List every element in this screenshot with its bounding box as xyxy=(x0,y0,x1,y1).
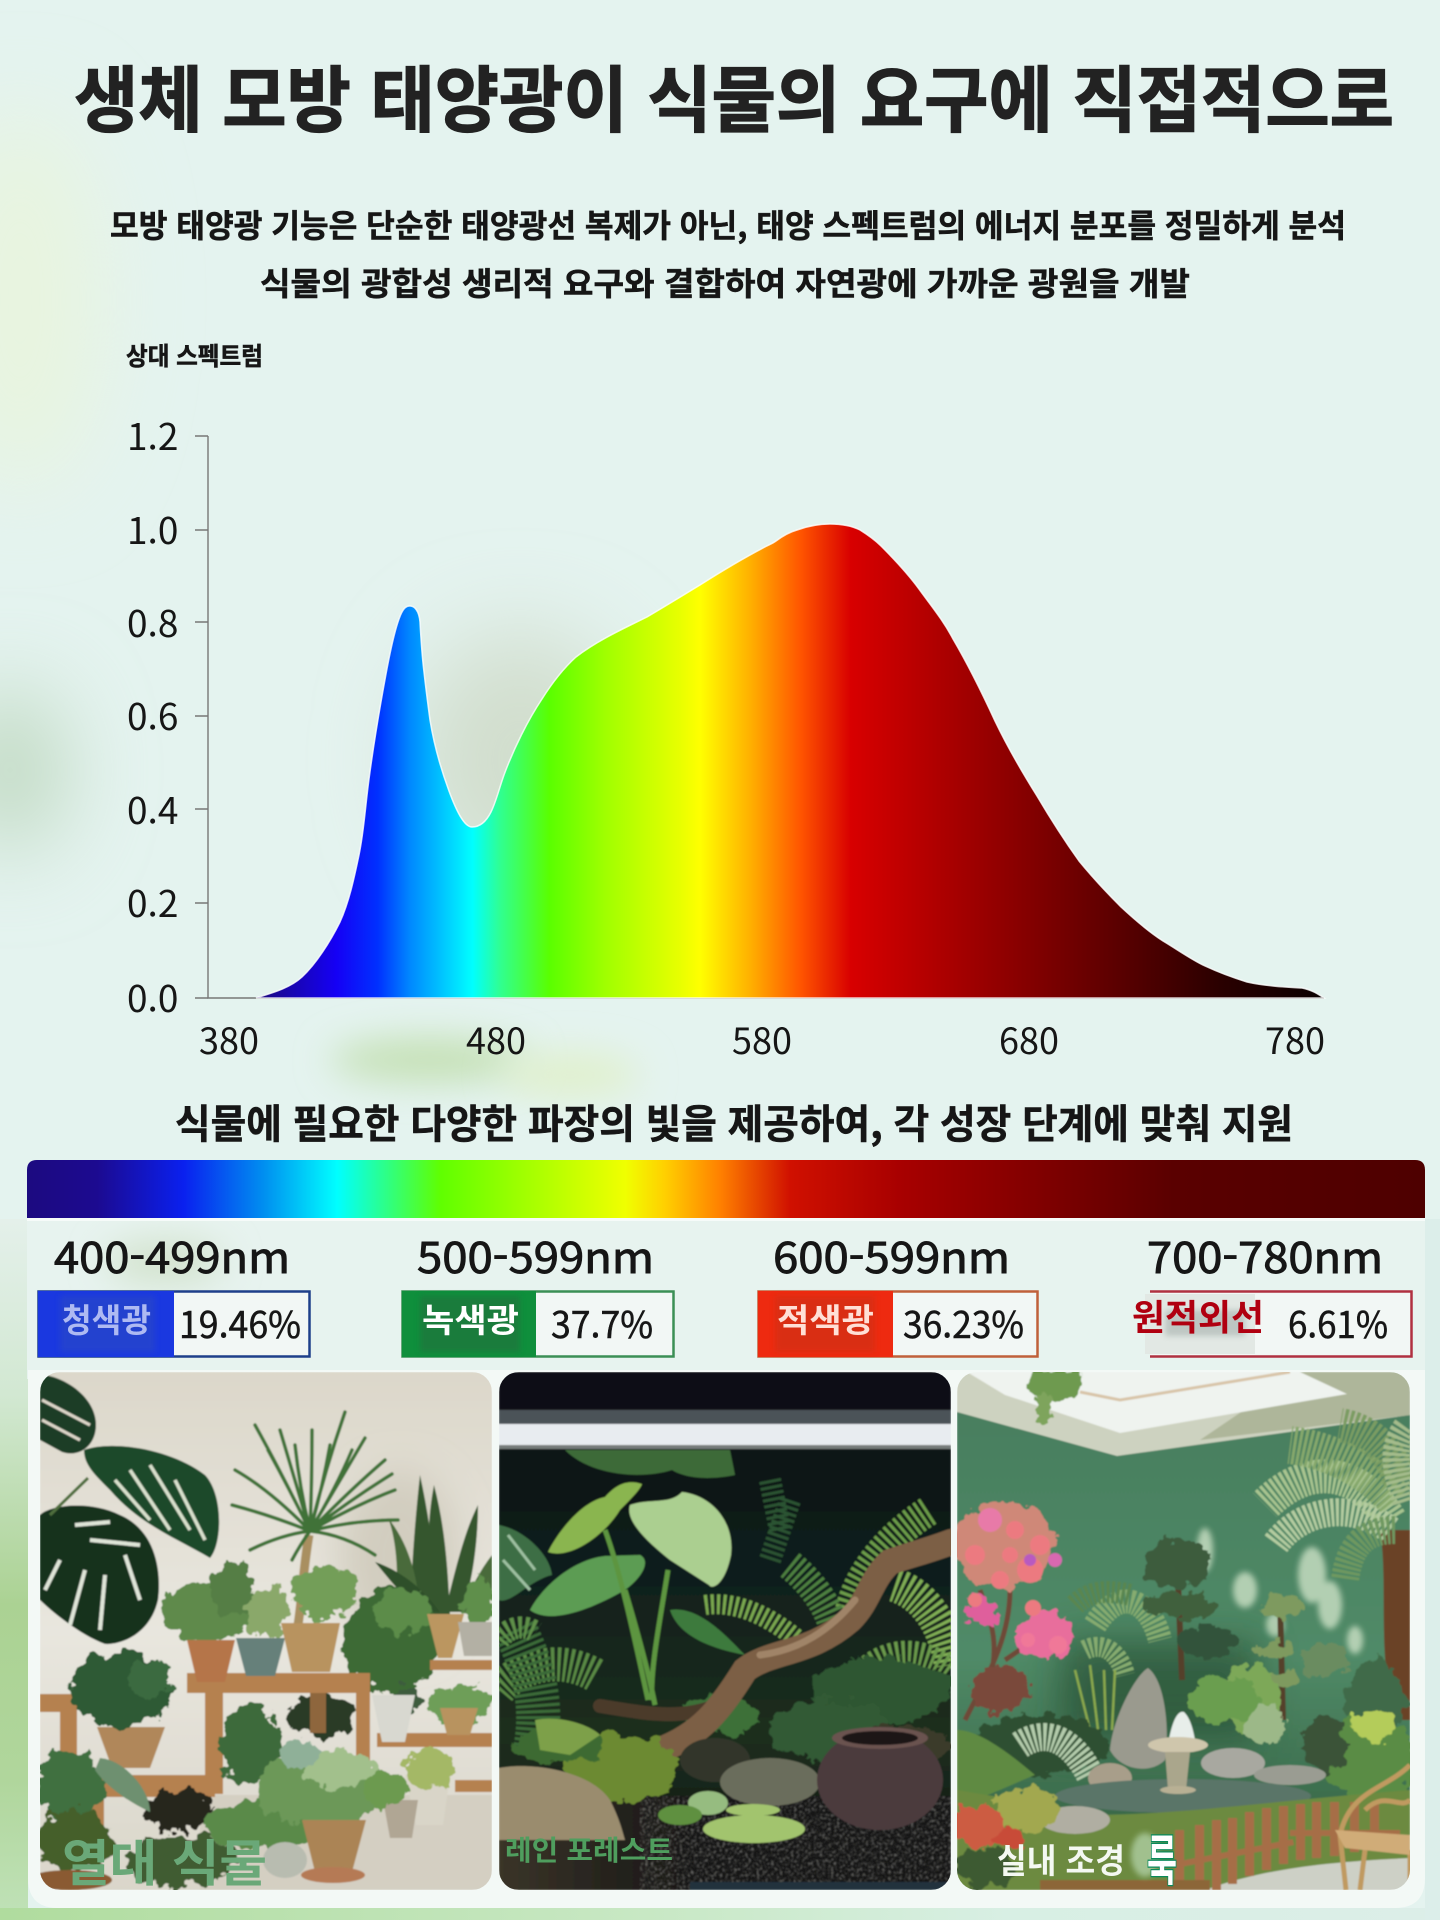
shelves xyxy=(40,1660,492,1835)
band: infrared xyxy=(1132,1225,1412,1356)
chart: x axis labels xyxy=(199,1013,1325,1065)
flowers xyxy=(962,1589,1020,1722)
garden base xyxy=(970,1664,1414,1806)
spectrum bar xyxy=(27,1160,1425,1219)
chart: x axis labels: 680 xyxy=(999,1013,1059,1065)
photo: indoor landscaping xyxy=(949,1369,1414,1896)
label: 열대 식물 xyxy=(62,1824,267,1896)
dracaena xyxy=(232,1412,398,1625)
big leaves xyxy=(499,1482,745,1705)
chart: x axis labels: 580 xyxy=(732,1013,792,1065)
chart: x axis labels: 380 xyxy=(199,1013,259,1065)
chart: x axis labels: 480 xyxy=(466,1013,526,1065)
band: green: 500-599nm xyxy=(417,1225,654,1286)
band: infrared: 원적외선 xyxy=(1132,1289,1264,1341)
panel: photo frame xyxy=(28,1370,1425,1908)
chart: y axis labels: 0.0 xyxy=(127,969,178,1023)
title: 생체 모방 태양광이 식물의 요구에 직접적으로 xyxy=(74,42,1394,147)
band: red: 적색광 xyxy=(777,1294,874,1342)
chart: y axis labels: 0.2 xyxy=(127,874,178,928)
label xyxy=(998,1830,1176,1886)
chart: y axis labels: 0.4 xyxy=(127,781,178,835)
label: 레인 포레스트 xyxy=(505,1829,673,1869)
chart: x axis labels: 780 xyxy=(1265,1013,1325,1065)
label: 룩 xyxy=(1147,1817,1177,1896)
chart: axes xyxy=(195,436,1324,998)
label: 실내 조경 xyxy=(997,1834,1125,1883)
section heading: 식물에 필요한 다양한 파장의 빛을 제공하여, 각 성장 단계에 맞춰 지원 xyxy=(175,1092,1293,1150)
path xyxy=(1205,1858,1410,1890)
band: blue: 400-499nm xyxy=(54,1225,290,1286)
panel: wavelength bands xyxy=(27,1160,1425,1379)
band: infrared: 6.61% xyxy=(1288,1295,1388,1349)
chart: y axis labels xyxy=(127,407,178,1023)
chart: y axis labels: 0.6 xyxy=(127,687,178,741)
band: green: 녹색광 xyxy=(422,1294,519,1342)
palm tree xyxy=(1265,1425,1410,1720)
ceiling xyxy=(957,1372,1410,1456)
foreground plants xyxy=(35,1652,454,1886)
spectrum chart xyxy=(126,337,1325,1065)
pots xyxy=(97,1614,492,1838)
water reflection xyxy=(565,1450,735,1478)
band: green: 37.7% xyxy=(551,1295,653,1349)
band: blue: 19.46% xyxy=(179,1295,301,1349)
bottom ground xyxy=(499,1796,951,1890)
band: green xyxy=(402,1225,674,1357)
monstera leaves xyxy=(40,1374,219,1644)
wall light patches xyxy=(1197,1528,1363,1654)
band: blue: 청색광 xyxy=(62,1294,151,1342)
subtitle: 식물의 광합성 생리적 요구와 결합하여 자연광에 가까운 광원을 개발 xyxy=(260,259,1190,305)
moss and rocks xyxy=(499,1719,820,1840)
lamp xyxy=(499,1390,951,1450)
band: blue xyxy=(38,1225,310,1357)
wicker chair xyxy=(1340,1765,1410,1890)
shelf plants xyxy=(160,1564,494,1737)
chart: y axis labels: 0.8 xyxy=(127,594,178,648)
band: red: 600-599nm xyxy=(773,1225,1010,1286)
subtitle xyxy=(110,201,1346,305)
chart: y axis title: 상대 스펙트럼 xyxy=(126,337,263,373)
chart: y axis labels: 1.2 xyxy=(127,407,178,461)
photo: rainforest xyxy=(499,1372,951,1890)
palm xyxy=(1075,1592,1160,1675)
band: infrared: 700-780nm xyxy=(1147,1225,1383,1286)
subtitle: 모방 태양광 기능은 단순한 태양광선 복제가 아닌, 태양 스펙트럼의 에너지 분포를 정밀하게 분석 xyxy=(110,201,1346,247)
clay pot xyxy=(817,1727,943,1830)
photo: tropical plants xyxy=(28,1372,494,1896)
foreground lawn xyxy=(957,1790,1410,1890)
snake plant xyxy=(375,1475,492,1615)
hanging leaves xyxy=(1027,1369,1083,1424)
ferns behind xyxy=(499,1480,951,1750)
chart: y axis labels: 1.0 xyxy=(127,501,178,555)
fence xyxy=(1040,1802,1400,1890)
band: red: 36.23% xyxy=(903,1295,1024,1349)
driftwood xyxy=(600,1542,951,1750)
lily pads xyxy=(658,1791,805,1843)
rocks and fountain xyxy=(1055,1668,1326,1813)
topiary xyxy=(1178,1580,1283,1720)
chart: spectrum curve xyxy=(256,524,1324,998)
band: red xyxy=(758,1225,1038,1357)
